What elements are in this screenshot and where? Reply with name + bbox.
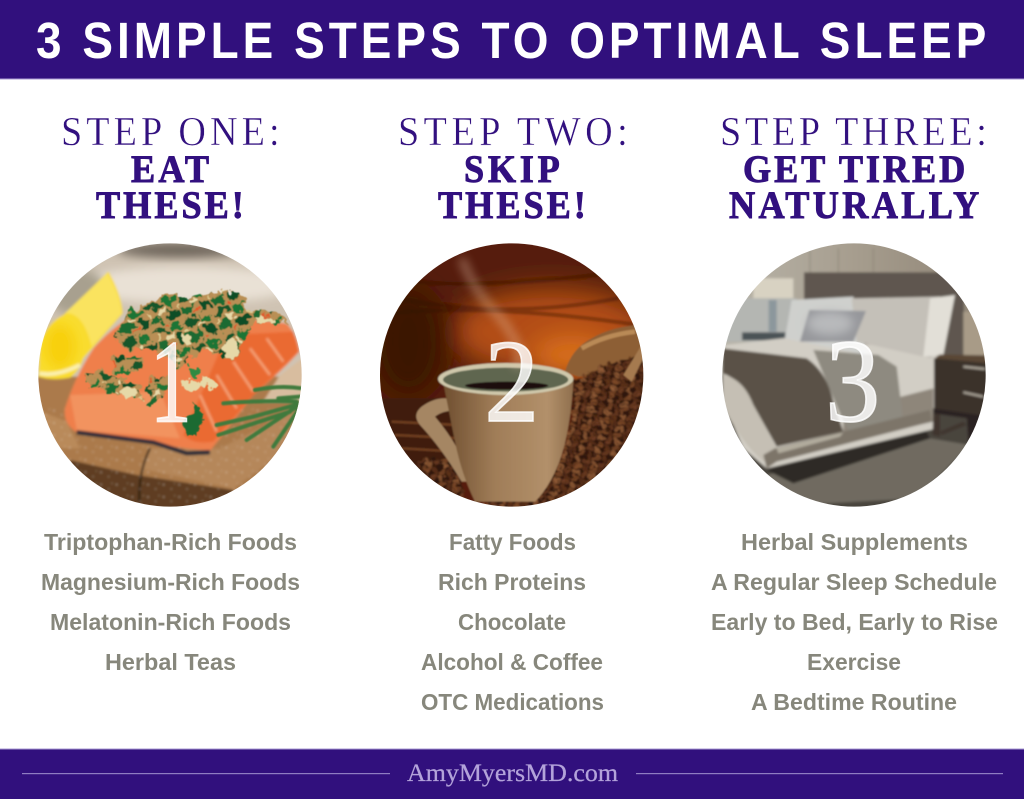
list: eat these: Magnesium-Rich Foods — [41, 569, 300, 595]
list: skip these: OTC Medications — [421, 689, 604, 715]
list: eat these: Melatonin-Rich Foods — [50, 609, 291, 635]
heading: step one — [61, 109, 280, 227]
list: skip these: Rich Proteins — [438, 569, 586, 595]
title: 3 SIMPLE STEPS TO OPTIMAL SLEEP — [36, 13, 986, 70]
photo: steaming coffee cup with beans, numbered 2 — [380, 243, 644, 507]
list: eat these — [41, 529, 300, 675]
list: get tired naturally: Early to Bed, Early to Rise — [711, 609, 998, 635]
lamp — [769, 300, 777, 332]
mattress — [723, 337, 937, 468]
photo: bedroom with made bed, numbered 3 — [717, 238, 993, 515]
number 3: 3 — [825, 316, 880, 447]
footer website: AmyMyersMD.com — [407, 760, 619, 787]
heading: step two: SKIP — [464, 148, 560, 191]
photo: salmon with herbs and lemon, numbered 1 — [33, 242, 307, 512]
heading: step two — [398, 109, 628, 227]
headboard — [804, 272, 964, 356]
list: get tired naturally: A Regular Sleep Schedule — [711, 569, 997, 595]
wall — [720, 242, 990, 375]
number 2: 2 — [484, 316, 539, 447]
list: get tired naturally: Exercise — [807, 649, 901, 675]
herbs and garlic — [83, 292, 290, 438]
nightstand — [934, 357, 990, 417]
rosemary sprig — [217, 387, 302, 447]
column 3: step three — [711, 109, 998, 715]
number 1: 1 — [150, 317, 192, 448]
heading: step three: NATURALLY — [729, 184, 979, 227]
list: skip these: Fatty Foods — [449, 529, 576, 555]
heading: step two: THESE! — [438, 184, 586, 227]
heading: step three — [720, 109, 987, 227]
lemon — [38, 272, 123, 379]
burlap sack — [565, 325, 645, 377]
column 2: step two — [372, 109, 655, 715]
heading: step two: STEP TWO: — [398, 109, 628, 154]
list: skip these: Alcohol & Coffee — [421, 649, 603, 675]
pillows — [785, 297, 867, 355]
footer banner — [0, 748, 1024, 799]
cup handle — [416, 398, 472, 482]
bed frame foot — [723, 375, 777, 462]
heading: step one: THESE! — [96, 184, 244, 227]
grey runner over bed — [813, 349, 902, 416]
list: skip these: Chocolate — [458, 609, 566, 635]
list: eat these: Herbal Teas — [105, 649, 236, 675]
list: skip these — [421, 529, 604, 715]
heading: step three: GET TIRED — [743, 148, 965, 191]
salmon fillet — [65, 307, 299, 450]
heading: step three: STEP THREE: — [720, 109, 987, 154]
list: get tired naturally: A Bedtime Routine — [751, 689, 957, 715]
heading: step one: STEP ONE: — [61, 109, 280, 154]
list: eat these: Triptophan-Rich Foods — [44, 529, 297, 555]
list: get tired naturally — [711, 529, 998, 715]
floor — [750, 414, 969, 506]
column 1: step one — [33, 109, 307, 675]
dark throw — [723, 348, 843, 447]
coffee beans — [417, 356, 644, 506]
list: get tired naturally: Herbal Supplements — [741, 529, 968, 555]
heading: step one: EAT — [131, 148, 209, 191]
cup body — [443, 378, 573, 502]
cup rim — [438, 363, 573, 395]
header banner — [0, 0, 1024, 80]
steam — [462, 258, 520, 368]
